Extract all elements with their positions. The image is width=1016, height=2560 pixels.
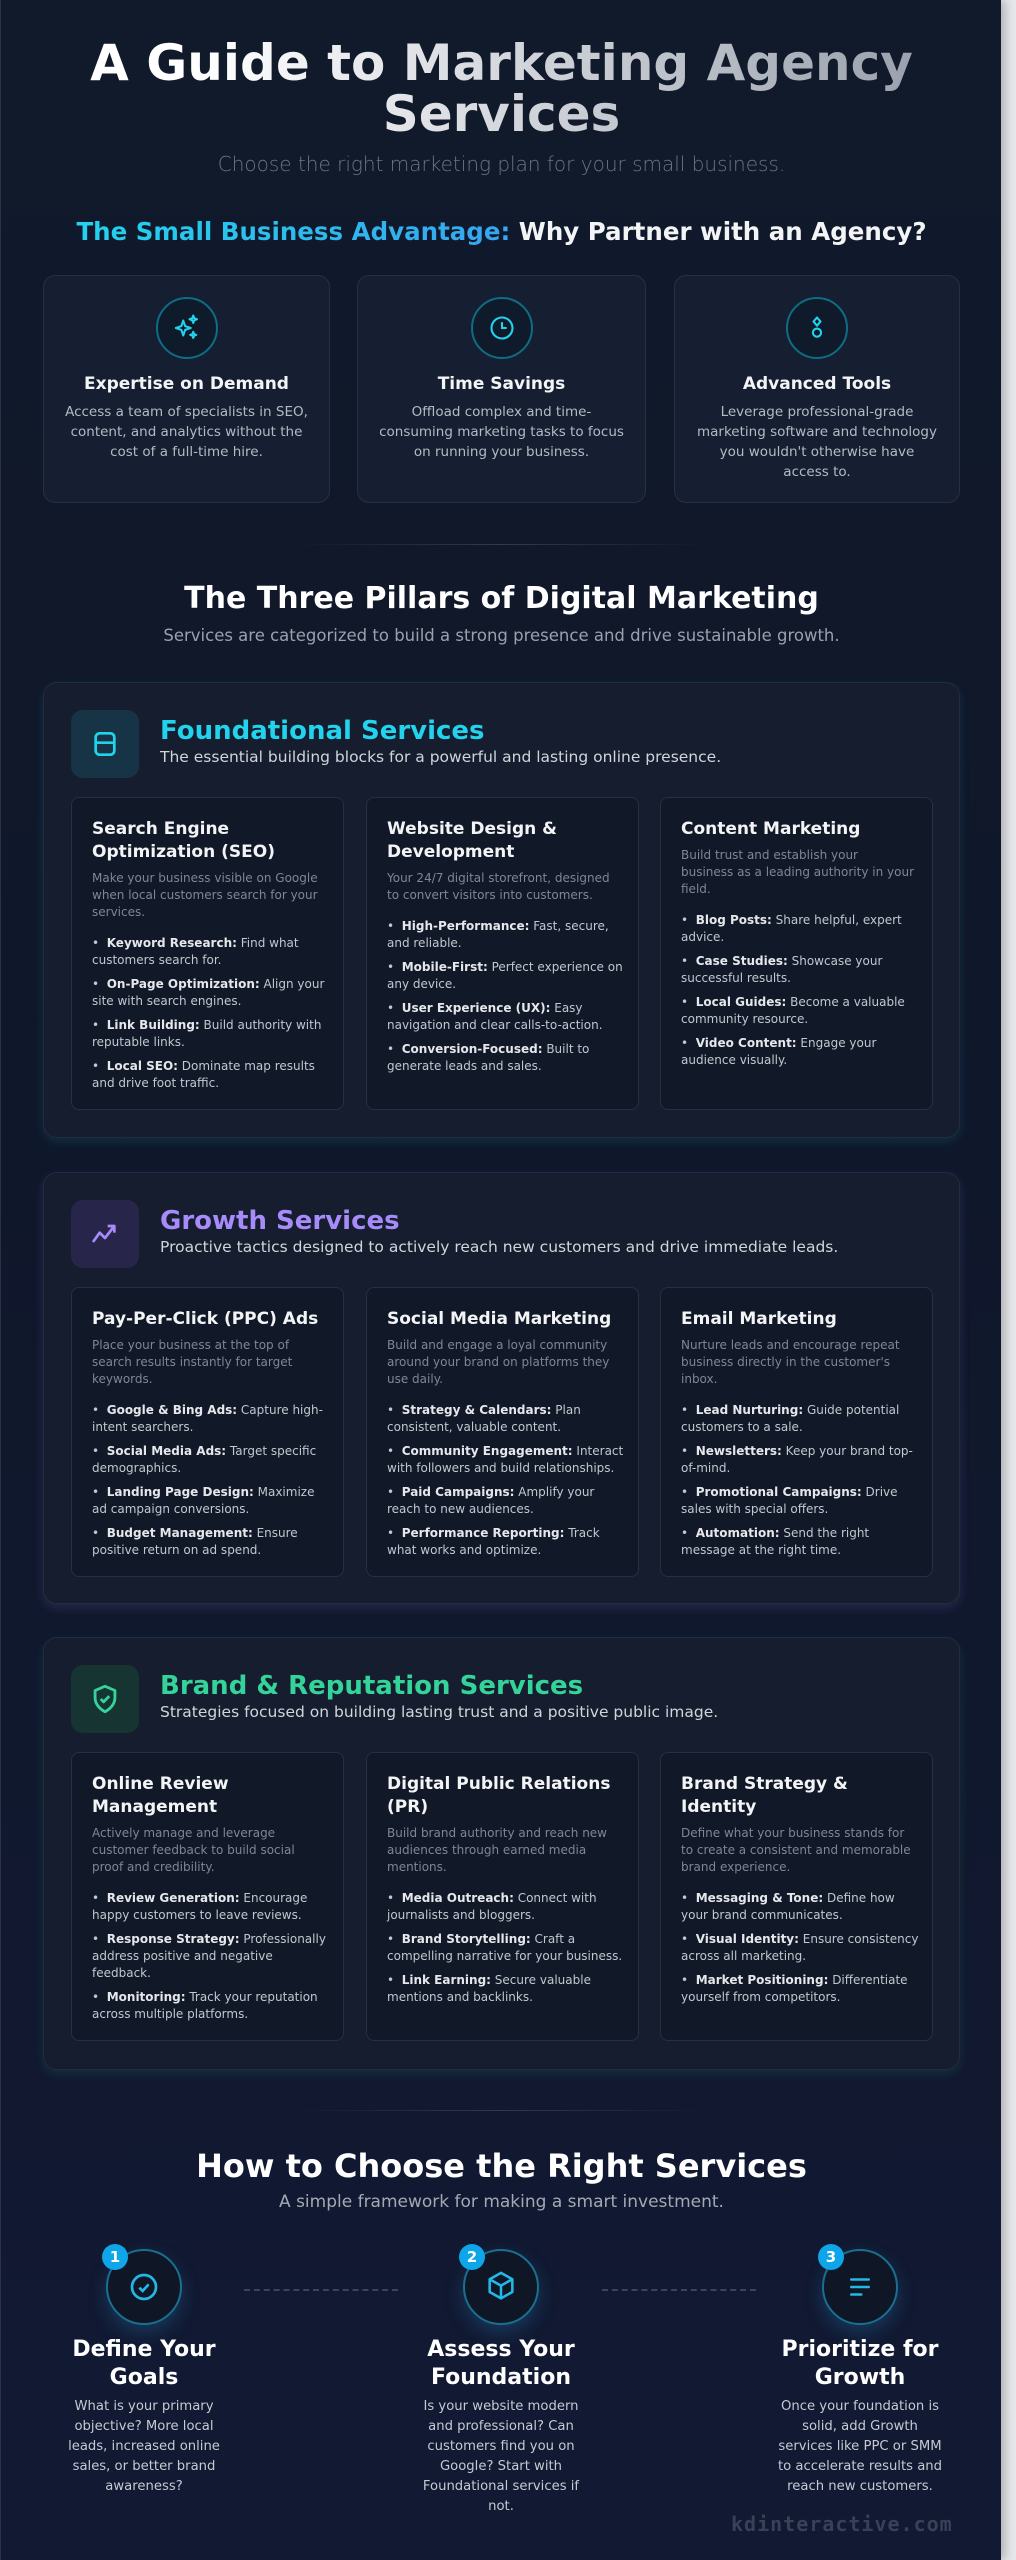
card: content: • Blog Posts: Share helpful, expert advice. — [681, 913, 902, 944]
card: website: • User Experience (UX): Easy navigation and clear calls-to-action. — [387, 1001, 603, 1032]
step 1: Goals — [110, 2365, 178, 2390]
card: SEO — [71, 797, 344, 1110]
title — [1, 38, 1002, 140]
step 1 — [68, 2244, 220, 2494]
card: SEO: • Keyword Research: Find what customers search for. — [92, 936, 299, 967]
icon: trend — [71, 1200, 139, 1268]
arrow: dashed connector 1 — [244, 2289, 398, 2291]
card: content: • Local Guides: Become a valuable community resource. — [681, 995, 905, 1026]
card: SEO: • Link Building: Build authority with reputable links. — [92, 1018, 321, 1049]
step 3 — [778, 2244, 942, 2494]
card: PPC: • Budget Management: Ensure positive return on ad spend. — [92, 1526, 298, 1557]
card: social: Build and engage a loyal community around your brand on platforms they use daily. — [387, 1338, 609, 1386]
card: email — [660, 1287, 933, 1577]
card: SEO: • On-Page Optimization: Align your site with search engines. — [92, 977, 324, 1008]
subheading: pillars: Services are categorized to build a strong presence and drive sustainable growth. — [163, 626, 840, 645]
arrow: dashed connector 2 — [602, 2289, 756, 2291]
step 2 — [423, 2244, 580, 2514]
watermark: kdinteractive.com — [731, 2512, 953, 2536]
subtitle: Choose the right marketing plan for your small business. — [218, 152, 785, 176]
panel: brand & reputation — [43, 1637, 960, 2070]
card: reviews: • Response Strategy: Professionally address positive and negative feedback. — [92, 1932, 326, 1980]
card: social: • Performance Reporting: Track what works and optimize. — [387, 1526, 600, 1557]
card: brand strategy: • Market Positioning: Differentiate yourself from competitors. — [681, 1973, 908, 2004]
card: social: Social Media Marketing — [387, 1309, 611, 1329]
heading: how to choose: How to Choose the Right Services — [196, 2147, 807, 2185]
step 2: Is your website modern and professional? Can customers find you on Google? Start with Foundational services if not. — [423, 2399, 579, 2514]
panel: growth services: Proactive tactics designed to actively reach new customers and drive immediate leads. — [160, 1238, 838, 1256]
card: PR: • Link Earning: Secure valuable mentions and backlinks. — [387, 1973, 591, 2004]
card: PR: • Brand Storytelling: Craft a compelling narrative for your business. — [387, 1932, 622, 1963]
card: brand strategy: • Messaging & Tone: Define how your brand communicates. — [681, 1891, 895, 1922]
heading: three pillars: The Three Pillars of Digital Marketing — [184, 581, 819, 616]
card: website — [366, 797, 639, 1110]
card: advanced tools: Advanced Tools — [743, 374, 891, 394]
card: email: Nurture leads and encourage repeat business directly in the customer's inbox. — [681, 1338, 900, 1386]
card: content — [660, 797, 933, 1110]
card: reviews: Actively manage and leverage customer feedback to build social proof and credibility. — [92, 1826, 295, 1874]
card: time savings: Offload complex and time-consuming marketing tasks to focus on running your business. — [379, 404, 624, 460]
card: social: • Community Engagement: Interact with followers and build relationships. — [387, 1444, 623, 1475]
card: content: • Video Content: Engage your audience visually. — [681, 1036, 876, 1067]
card: PPC: Place your business at the top of search results instantly for target keywords. — [92, 1338, 292, 1386]
card: social: • Paid Campaigns: Amplify your reach to new audiences. — [387, 1485, 594, 1516]
card: expertise: Access a team of specialists in SEO, content, and analytics without the cost of a full-time hire. — [65, 404, 308, 460]
card: PR: • Media Outreach: Connect with journalists and bloggers. — [387, 1891, 597, 1922]
card: email: Email Marketing — [681, 1309, 837, 1329]
card: PPC — [71, 1287, 344, 1577]
card: email: • Lead Nurturing: Guide potential customers to a sale. — [681, 1403, 899, 1434]
card: website: Website Design & Development — [387, 819, 557, 862]
heading: advantage: The Small Business Advantage: Why Partner with an Agency? — [76, 217, 927, 246]
card: website: • Mobile-First: Perfect experience on any device. — [387, 960, 623, 991]
step 1: What is your primary objective? More local leads, increased online sales, or better brand awareness? — [68, 2399, 220, 2494]
step 3: services like PPC or SMM to accelerate results and reach new customers. — [778, 2439, 942, 2494]
panel: foundational services: Foundational Services — [160, 716, 485, 746]
card: advanced tools — [674, 275, 960, 503]
card: PR — [366, 1752, 639, 2041]
step 1: Define Your — [72, 2337, 216, 2362]
step 3: Once your foundation is solid, add Growth — [781, 2399, 939, 2434]
icon: cube — [463, 2249, 539, 2325]
icon: tool — [786, 297, 848, 359]
card: brand strategy: • Visual Identity: Ensure consistency across all marketing. — [681, 1932, 918, 1963]
card: PPC: • Google & Bing Ads: Capture high-intent searchers. — [92, 1403, 323, 1434]
panel: growth services: Growth Services — [160, 1206, 400, 1236]
card: reviews: Online Review Management — [92, 1774, 229, 1817]
card: time savings: Time Savings — [438, 374, 565, 394]
panel: growth services — [43, 1172, 960, 1604]
card: PPC: • Social Media Ads: Target specific demographics. — [92, 1444, 316, 1475]
card: email: • Promotional Campaigns: Drive sales with special offers. — [681, 1485, 898, 1516]
card: reviews — [71, 1752, 344, 2041]
panel: brand & reputation: Brand & Reputation Services — [160, 1671, 583, 1701]
step 2: Foundation — [431, 2365, 571, 2390]
icon: check circle — [106, 2249, 182, 2325]
card: content: Build trust and establish your business as a leading authority in your field. — [681, 848, 914, 896]
card: social: • Strategy & Calendars: Plan consistent, valuable content. — [387, 1403, 581, 1434]
icon: clock — [470, 297, 532, 359]
card: PR: Build brand authority and reach new audiences through earned media mentions. — [387, 1826, 607, 1874]
subheading: framework: A simple framework for making a smart investment. — [279, 2192, 724, 2212]
card: content: • Case Studies: Showcase your successful results. — [681, 954, 882, 985]
card: advanced tools: Leverage professional-grade marketing software and technology you wouldn't otherwise have access to. — [697, 404, 937, 480]
card: email: • Automation: Send the right message at the right time. — [681, 1526, 869, 1557]
step 3: 3 — [826, 2248, 836, 2266]
card: social — [366, 1287, 639, 1577]
card: website: • Conversion-Focused: Built to generate leads and sales. — [387, 1042, 589, 1073]
card: brand strategy: Brand Strategy & Identity — [681, 1774, 848, 1817]
step 2: 2 — [467, 2248, 477, 2266]
panel: foundational services: The essential building blocks for a powerful and lasting online presence. — [160, 748, 721, 766]
card: website: • High-Performance: Fast, secure, and reliable. — [387, 919, 609, 950]
step 2: Assess Your — [427, 2337, 575, 2362]
card: SEO: Make your business visible on Google when local customers search for your services. — [92, 871, 318, 919]
card: time savings — [357, 275, 646, 503]
panel: foundational services — [43, 682, 960, 1138]
step 3: Prioritize for — [782, 2337, 938, 2362]
icon: layout — [71, 710, 139, 778]
card: PPC: Pay-Per-Click (PPC) Ads — [92, 1309, 318, 1329]
icon: sparkles — [156, 297, 218, 359]
card: reviews: • Review Generation: Encourage happy customers to leave reviews. — [92, 1891, 307, 1922]
title: Services — [383, 85, 620, 143]
card: website: Your 24/7 digital storefront, designed to convert visitors into customers. — [387, 871, 610, 902]
card: brand strategy — [660, 1752, 933, 2041]
card: email: • Newsletters: Keep your brand top-of-mind. — [681, 1444, 913, 1475]
card: SEO: Search Engine Optimization (SEO) — [92, 819, 275, 862]
icon: shield — [71, 1665, 139, 1733]
step 3: Growth — [815, 2365, 905, 2390]
card: reviews: • Monitoring: Track your reputation across multiple platforms. — [92, 1990, 318, 2021]
title: A Guide to Marketing Agency — [90, 34, 913, 92]
step 1: 1 — [110, 2248, 120, 2266]
card: PPC: • Landing Page Design: Maximize ad campaign conversions. — [92, 1485, 314, 1516]
panel: brand & reputation: Strategies focused on building lasting trust and a positive public image. — [160, 1703, 718, 1721]
card: content: Content Marketing — [681, 819, 860, 839]
card: brand strategy: Define what your business stands for to create a consistent and memorable brand experience. — [681, 1826, 911, 1874]
card: PR: Digital Public Relations (PR) — [387, 1774, 610, 1817]
card: SEO: • Local SEO: Dominate map results and drive foot traffic. — [92, 1059, 315, 1090]
card: expertise — [43, 275, 330, 503]
icon: lines — [822, 2249, 898, 2325]
card: expertise: Expertise on Demand — [84, 374, 289, 394]
